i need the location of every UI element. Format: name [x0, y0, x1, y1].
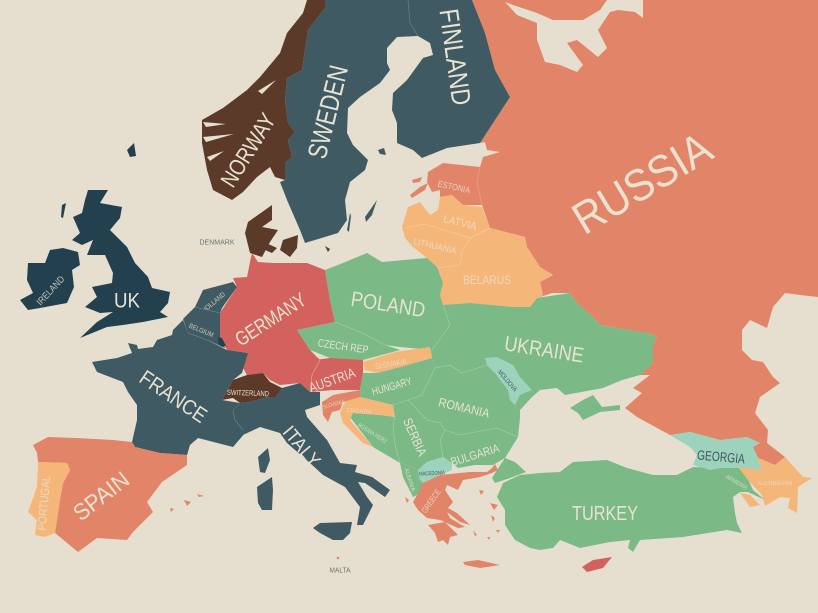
- Bulgaria: [440, 428, 518, 469]
- Moldova: MOLDOVA: [496, 369, 518, 394]
- Czech Republic: CZECH REP: [317, 338, 369, 356]
- Norway: [202, 0, 325, 200]
- Hungary: [360, 358, 435, 405]
- Armenia label: ARMENIA: [724, 474, 748, 492]
- Georgia: GEORGIA: [696, 447, 746, 467]
- France: FRANCE: [135, 366, 211, 428]
- Latvia, Lithuania and Belarus: [402, 195, 553, 307]
- Denmark label: DENMARK: [200, 238, 234, 246]
- Bosnia: [350, 413, 400, 463]
- Estonia: [410, 163, 482, 205]
- Greece: [405, 464, 500, 568]
- UK: UK: [114, 290, 140, 312]
- Russia: [472, 0, 818, 465]
- Switzerland: SWITZERLAND: [227, 388, 270, 398]
- Romania: ROMANIA: [437, 395, 491, 421]
- Austria: AUSTRIA: [307, 364, 358, 396]
- Czech Republic: [297, 322, 400, 360]
- Switzerland: [222, 373, 282, 403]
- Sweden: SWEDEN: [302, 62, 354, 162]
- Latvia, Lithuania and Belarus: LITHUANIA: [412, 236, 458, 256]
- Albania: ALBANIA: [402, 468, 416, 492]
- Holland: HOLLAND: [201, 291, 227, 315]
- Spain: SPAIN: [68, 466, 134, 526]
- Poland: [325, 253, 450, 350]
- Azerbaijan: AZERBAIJAN: [758, 481, 792, 487]
- Finland: [392, 0, 510, 158]
- Slovenia: [322, 390, 360, 422]
- Sweden: [280, 0, 418, 243]
- Macedonia: [418, 457, 452, 483]
- Germany: [220, 253, 335, 392]
- European Turkey: [492, 458, 526, 483]
- Estonia: ESTONIA: [437, 179, 471, 195]
- Cyprus: [582, 557, 612, 572]
- Croatia: [340, 397, 395, 447]
- Holland: [195, 282, 237, 315]
- Malta dot: [337, 557, 339, 559]
- Denmark: [245, 205, 330, 257]
- Slovenia: SLOVENIA: [323, 399, 346, 411]
- Spain: [33, 437, 204, 552]
- Croatia: CROATIA: [346, 408, 372, 416]
- Bosnia: BOSNIA HERZ: [356, 423, 388, 445]
- Malta label: MALTA: [330, 568, 351, 574]
- Latvia, Lithuania and Belarus: LATVIA: [442, 213, 478, 233]
- Serbia: SERBIA: [400, 416, 430, 459]
- Latvia, Lithuania and Belarus: BELARUS: [463, 273, 511, 287]
- Ukraine: [430, 293, 657, 420]
- Belgium: BELGIUM: [188, 323, 214, 339]
- Finland: FINLAND: [433, 7, 477, 107]
- Hungary: HUNGARY: [371, 375, 414, 398]
- Serbia: [393, 400, 445, 470]
- Romania: [408, 365, 520, 437]
- Belgium: [183, 307, 225, 348]
- Moldova: [485, 357, 532, 405]
- Greece: GREECE: [419, 487, 443, 515]
- Germany: GERMANY: [231, 289, 311, 351]
- Ukraine: UKRAINE: [503, 332, 585, 368]
- Turkey: [497, 460, 765, 552]
- Slovakia: [363, 347, 432, 373]
- Macedonia: MACEDONIA: [419, 470, 445, 478]
- France: [92, 320, 248, 455]
- Azerbaijan: [738, 457, 812, 513]
- Georgia: [670, 432, 762, 470]
- Portugal: PORTUGAL: [35, 475, 53, 531]
- Italy: ITALY: [278, 422, 324, 472]
- Russia: RUSSIA: [563, 122, 721, 244]
- Italy: [233, 383, 390, 540]
- Poland: POLAND: [349, 288, 427, 322]
- Shetland and Faroe islands: [61, 143, 136, 218]
- Albania: [400, 463, 427, 497]
- Norway: NORWAY: [215, 108, 281, 192]
- Luxembourg: [218, 337, 226, 347]
- Portugal: [28, 462, 70, 537]
- Turkey: TURKEY: [572, 503, 638, 525]
- Ireland: IRELAND: [35, 274, 67, 308]
- UK: [72, 190, 170, 338]
- Bulgaria: BULGARIA: [449, 441, 501, 469]
- Slovakia: SLOVAKIA: [374, 357, 408, 371]
- Ireland: [20, 248, 80, 310]
